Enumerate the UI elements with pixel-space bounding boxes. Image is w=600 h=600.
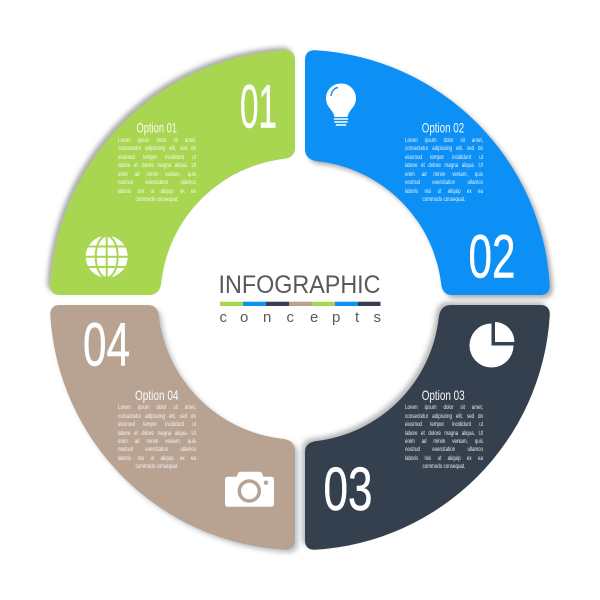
navy segment: [305, 305, 550, 550]
number 03: 03: [324, 455, 372, 523]
body text: nostrud exercitation ullamco: [118, 446, 196, 453]
body text: eiusmod tempor incididunt ut: [405, 421, 483, 428]
body text: commodo consequat.: [423, 196, 465, 203]
heading: Option 03: Option 03: [422, 387, 465, 403]
body text: labore et dolore magna aliqua. Ut: [405, 430, 483, 436]
body text: Lorem ipsum dolor sit amet,: [118, 137, 196, 144]
body text: enim ad minim veniam, quis: [405, 171, 483, 178]
body text: eiusmod tempor incididunt ut: [405, 154, 483, 161]
body text: commodo consequat.: [136, 463, 178, 470]
body text: [118, 137, 234, 209]
subtitle: concepts: concepts: [220, 309, 381, 326]
body text: consectetur adipiscing elit, sed do: [405, 145, 483, 152]
body text: commodo consequat.: [423, 463, 465, 470]
icon: light bulb: [326, 84, 356, 125]
body text: [405, 404, 521, 476]
body text: laboris nisi ut aliquip ex ea: [405, 188, 483, 195]
icon: globe: [85, 235, 128, 278]
body text: consectetur adipiscing elit, sed do: [118, 413, 196, 420]
body text: nostrud exercitation ullamco: [405, 446, 483, 453]
body text: Lorem ipsum dolor sit amet,: [118, 404, 196, 411]
body text: laboris nisi ut aliquip ex ea: [118, 455, 196, 462]
body text: laboris nisi ut aliquip ex ea: [118, 188, 196, 195]
body text: labore et dolore magna aliqua. Ut: [118, 430, 196, 436]
body text: enim ad minim veniam, quis: [405, 438, 483, 445]
number 04: 04: [83, 311, 130, 379]
center title block: [218, 271, 381, 326]
body text: nostrud exercitation ullamco: [118, 179, 196, 186]
body text: Lorem ipsum dolor sit amet,: [405, 137, 483, 144]
body text: enim ad minim veniam, quis: [118, 438, 196, 445]
panel: option 01: [50, 50, 295, 295]
body text: consectetur adipiscing elit, sed do: [118, 145, 196, 152]
heading: Option 04: Option 04: [135, 387, 179, 403]
green segment: [50, 50, 295, 295]
number 02: 02: [468, 223, 516, 291]
heading: Option 02: Option 02: [422, 120, 464, 136]
heading: Option 01: Option 01: [136, 120, 177, 136]
taupe segment: [50, 305, 295, 550]
body text: eiusmod tempor incididunt ut: [118, 154, 196, 161]
body text: labore et dolore magna aliqua. Ut: [405, 162, 483, 169]
icon: camera: [225, 472, 274, 507]
body text: [118, 404, 234, 476]
title: INFOGRAPHIC: INFOGRAPHIC: [218, 271, 380, 299]
body text: laboris nisi ut aliquip ex ea: [405, 455, 483, 462]
icon: pie chart: [470, 322, 514, 368]
body text: [405, 137, 521, 209]
panel: option 03: [305, 305, 550, 550]
color bar: [220, 302, 380, 306]
body text: enim ad minim veniam, quis: [118, 171, 196, 178]
blue segment: [305, 50, 550, 295]
panel: option 02: [305, 50, 550, 295]
body text: consectetur adipiscing elit, sed do: [405, 413, 483, 420]
panel: option 04: [50, 305, 295, 550]
body text: Lorem ipsum dolor sit amet,: [405, 404, 483, 411]
body text: nostrud exercitation ullamco: [405, 179, 483, 186]
body text: commodo consequat.: [136, 196, 178, 203]
body text: labore et dolore magna aliqua. Ut: [118, 162, 196, 169]
number 01: 01: [240, 72, 277, 140]
body text: eiusmod tempor incididunt ut: [118, 421, 196, 428]
